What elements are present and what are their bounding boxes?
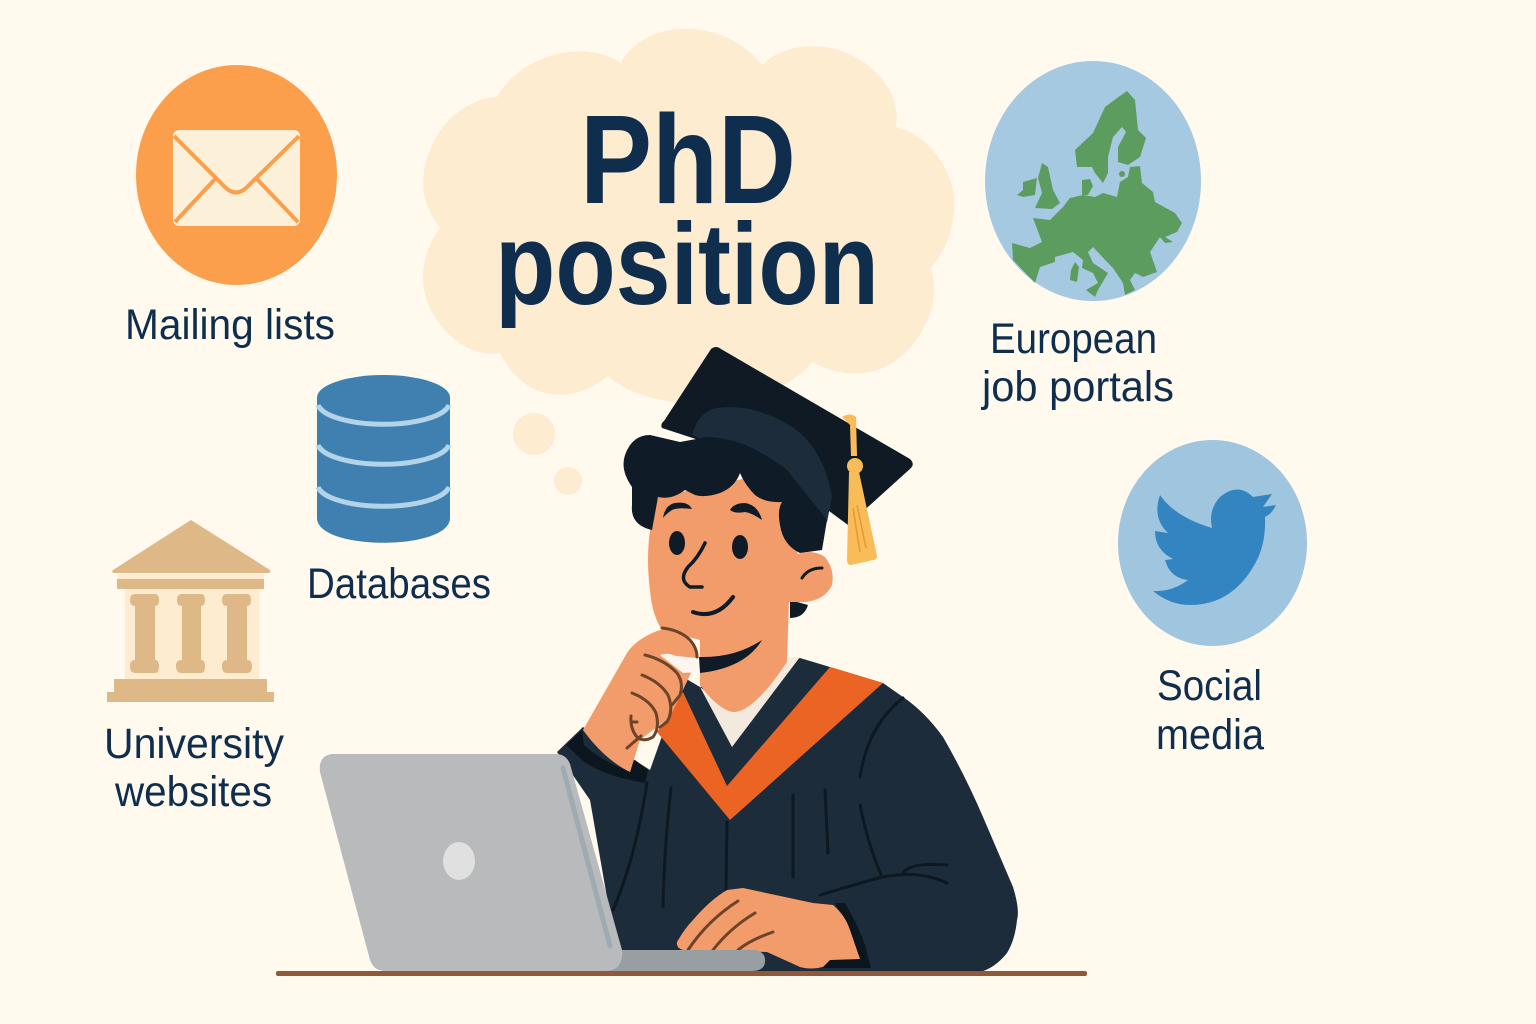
head and neck xyxy=(648,470,800,712)
icon: europe map globe xyxy=(985,61,1201,301)
gown body xyxy=(557,658,1018,972)
label: social media: Social xyxy=(1157,662,1262,710)
label: university websites: websites xyxy=(114,768,272,816)
tassel xyxy=(842,414,877,565)
typing hand xyxy=(677,888,860,968)
chin shadow xyxy=(699,640,762,673)
title: position xyxy=(495,199,879,329)
label: european job portals xyxy=(980,315,1174,411)
icon: databases cylinder xyxy=(317,375,450,543)
gown fold lines xyxy=(613,698,947,910)
title xyxy=(495,89,879,329)
hair xyxy=(624,435,827,553)
label: social media: media xyxy=(1156,711,1264,759)
right sleeve shadow xyxy=(820,903,871,968)
label: social media xyxy=(1156,662,1264,759)
label: european job portals: European xyxy=(990,315,1157,363)
sash orange xyxy=(657,667,883,820)
ear xyxy=(785,552,833,602)
mortarboard top xyxy=(661,347,913,525)
eyebrows xyxy=(663,503,762,520)
icon: social media bird xyxy=(1118,440,1307,646)
left sleeve cuff xyxy=(566,730,648,783)
hair back below ear xyxy=(790,600,808,618)
mouth xyxy=(693,597,733,614)
nose xyxy=(683,543,705,587)
eyes xyxy=(669,531,748,559)
laptop xyxy=(320,754,765,971)
desk line xyxy=(276,971,1087,976)
label: university websites: University xyxy=(104,720,284,768)
illustration: graduate with laptop xyxy=(557,347,1018,972)
label: mailing lists: Mailing lists xyxy=(125,301,335,349)
shirt collar xyxy=(700,657,800,747)
icon: mailing lists envelope xyxy=(136,65,337,285)
label: european job portals: job portals xyxy=(980,363,1174,411)
mortarboard band xyxy=(692,407,832,522)
hand at chin xyxy=(583,628,698,772)
thought cloud xyxy=(423,29,954,404)
title: PhD xyxy=(580,89,796,230)
label: databases: Databases xyxy=(307,560,491,608)
icon: university building xyxy=(107,520,274,702)
label: university websites xyxy=(104,720,284,816)
thought bubble small circles xyxy=(513,413,582,495)
